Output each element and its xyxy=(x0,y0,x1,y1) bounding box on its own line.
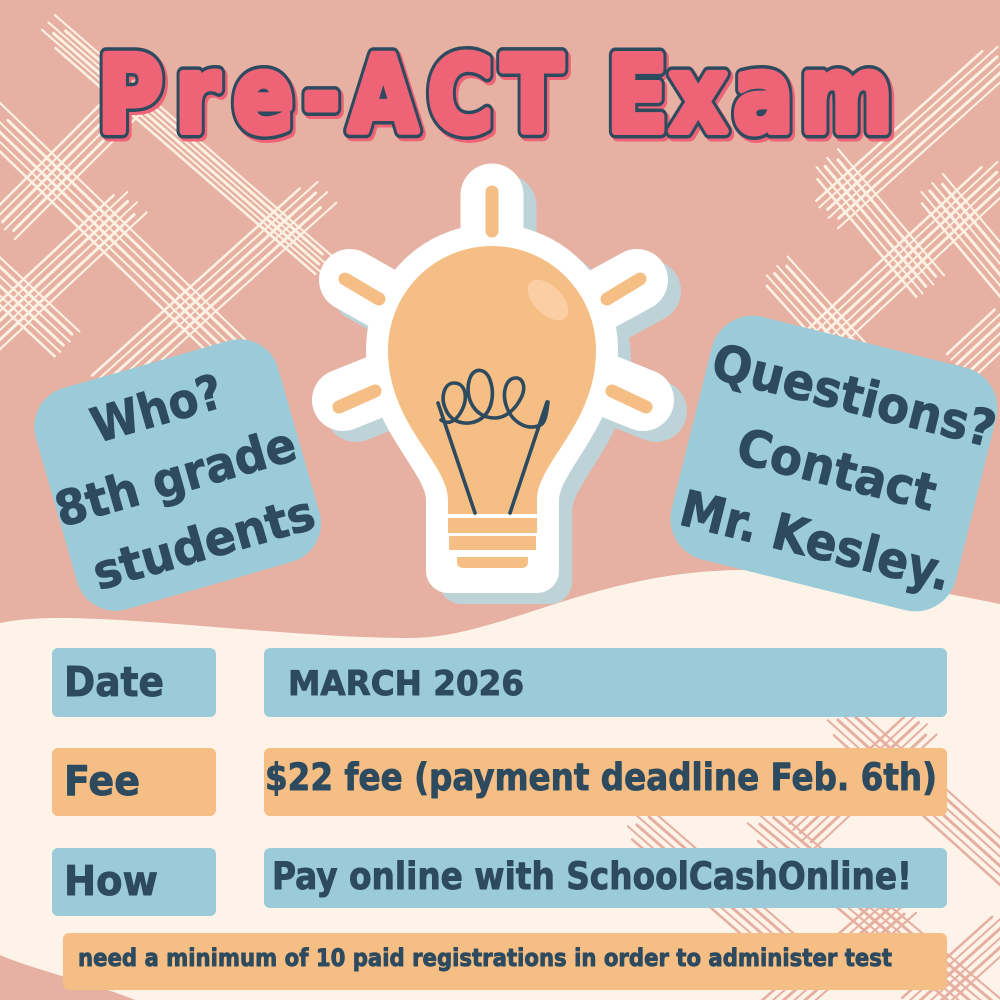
icon: light bulb xyxy=(339,192,656,582)
questions panel text: Contact xyxy=(731,417,942,523)
who panel text: 8th grade xyxy=(49,417,303,539)
who panel text: Who? xyxy=(85,364,229,454)
plaid pattern: bottom right xyxy=(623,699,1000,1000)
panel: questions xyxy=(662,307,1000,620)
row: how: How xyxy=(64,857,158,905)
cream wave panel xyxy=(0,570,1000,1000)
title: Pre-ACT Exam xyxy=(98,34,892,156)
bulb glass xyxy=(388,246,596,514)
plaid pattern: top left xyxy=(0,15,336,403)
who panel shape xyxy=(25,330,330,620)
title: Pre-ACT Exam xyxy=(98,34,892,156)
panel: who xyxy=(25,330,330,620)
date label xyxy=(52,648,216,717)
bottom left pink corner xyxy=(0,955,135,1000)
how value xyxy=(264,848,947,908)
who panel text xyxy=(29,348,322,607)
fee value xyxy=(264,748,947,816)
row: date: Date xyxy=(64,658,164,706)
questions panel shape xyxy=(662,307,1000,620)
filament xyxy=(438,370,548,513)
bulb sticker white border xyxy=(343,195,643,571)
plaid pattern: top right xyxy=(762,42,1000,380)
row: how xyxy=(52,848,947,916)
row: how: Pay online with SchoolCashOnline! xyxy=(272,855,912,898)
questions panel text: Mr. Kesley. xyxy=(674,479,957,603)
light rays xyxy=(339,192,646,407)
title: Pre-ACT Exam xyxy=(100,37,895,159)
who panel text: students xyxy=(87,485,321,602)
note: minimum registrations: need a minimum of 10 paid registrations in order to administer test xyxy=(78,944,892,972)
bulb base xyxy=(448,518,537,568)
fee label xyxy=(52,748,216,816)
date value xyxy=(264,648,947,717)
bulb sticker shadow xyxy=(356,206,656,582)
row: date xyxy=(52,648,947,717)
row: fee: Fee xyxy=(64,757,140,805)
bulb highlight xyxy=(520,272,576,328)
row: fee xyxy=(52,748,947,816)
how label xyxy=(52,848,216,916)
note: minimum registrations xyxy=(63,933,947,990)
questions panel text xyxy=(670,333,1000,605)
row: date: MARCH 2026 xyxy=(288,664,524,704)
